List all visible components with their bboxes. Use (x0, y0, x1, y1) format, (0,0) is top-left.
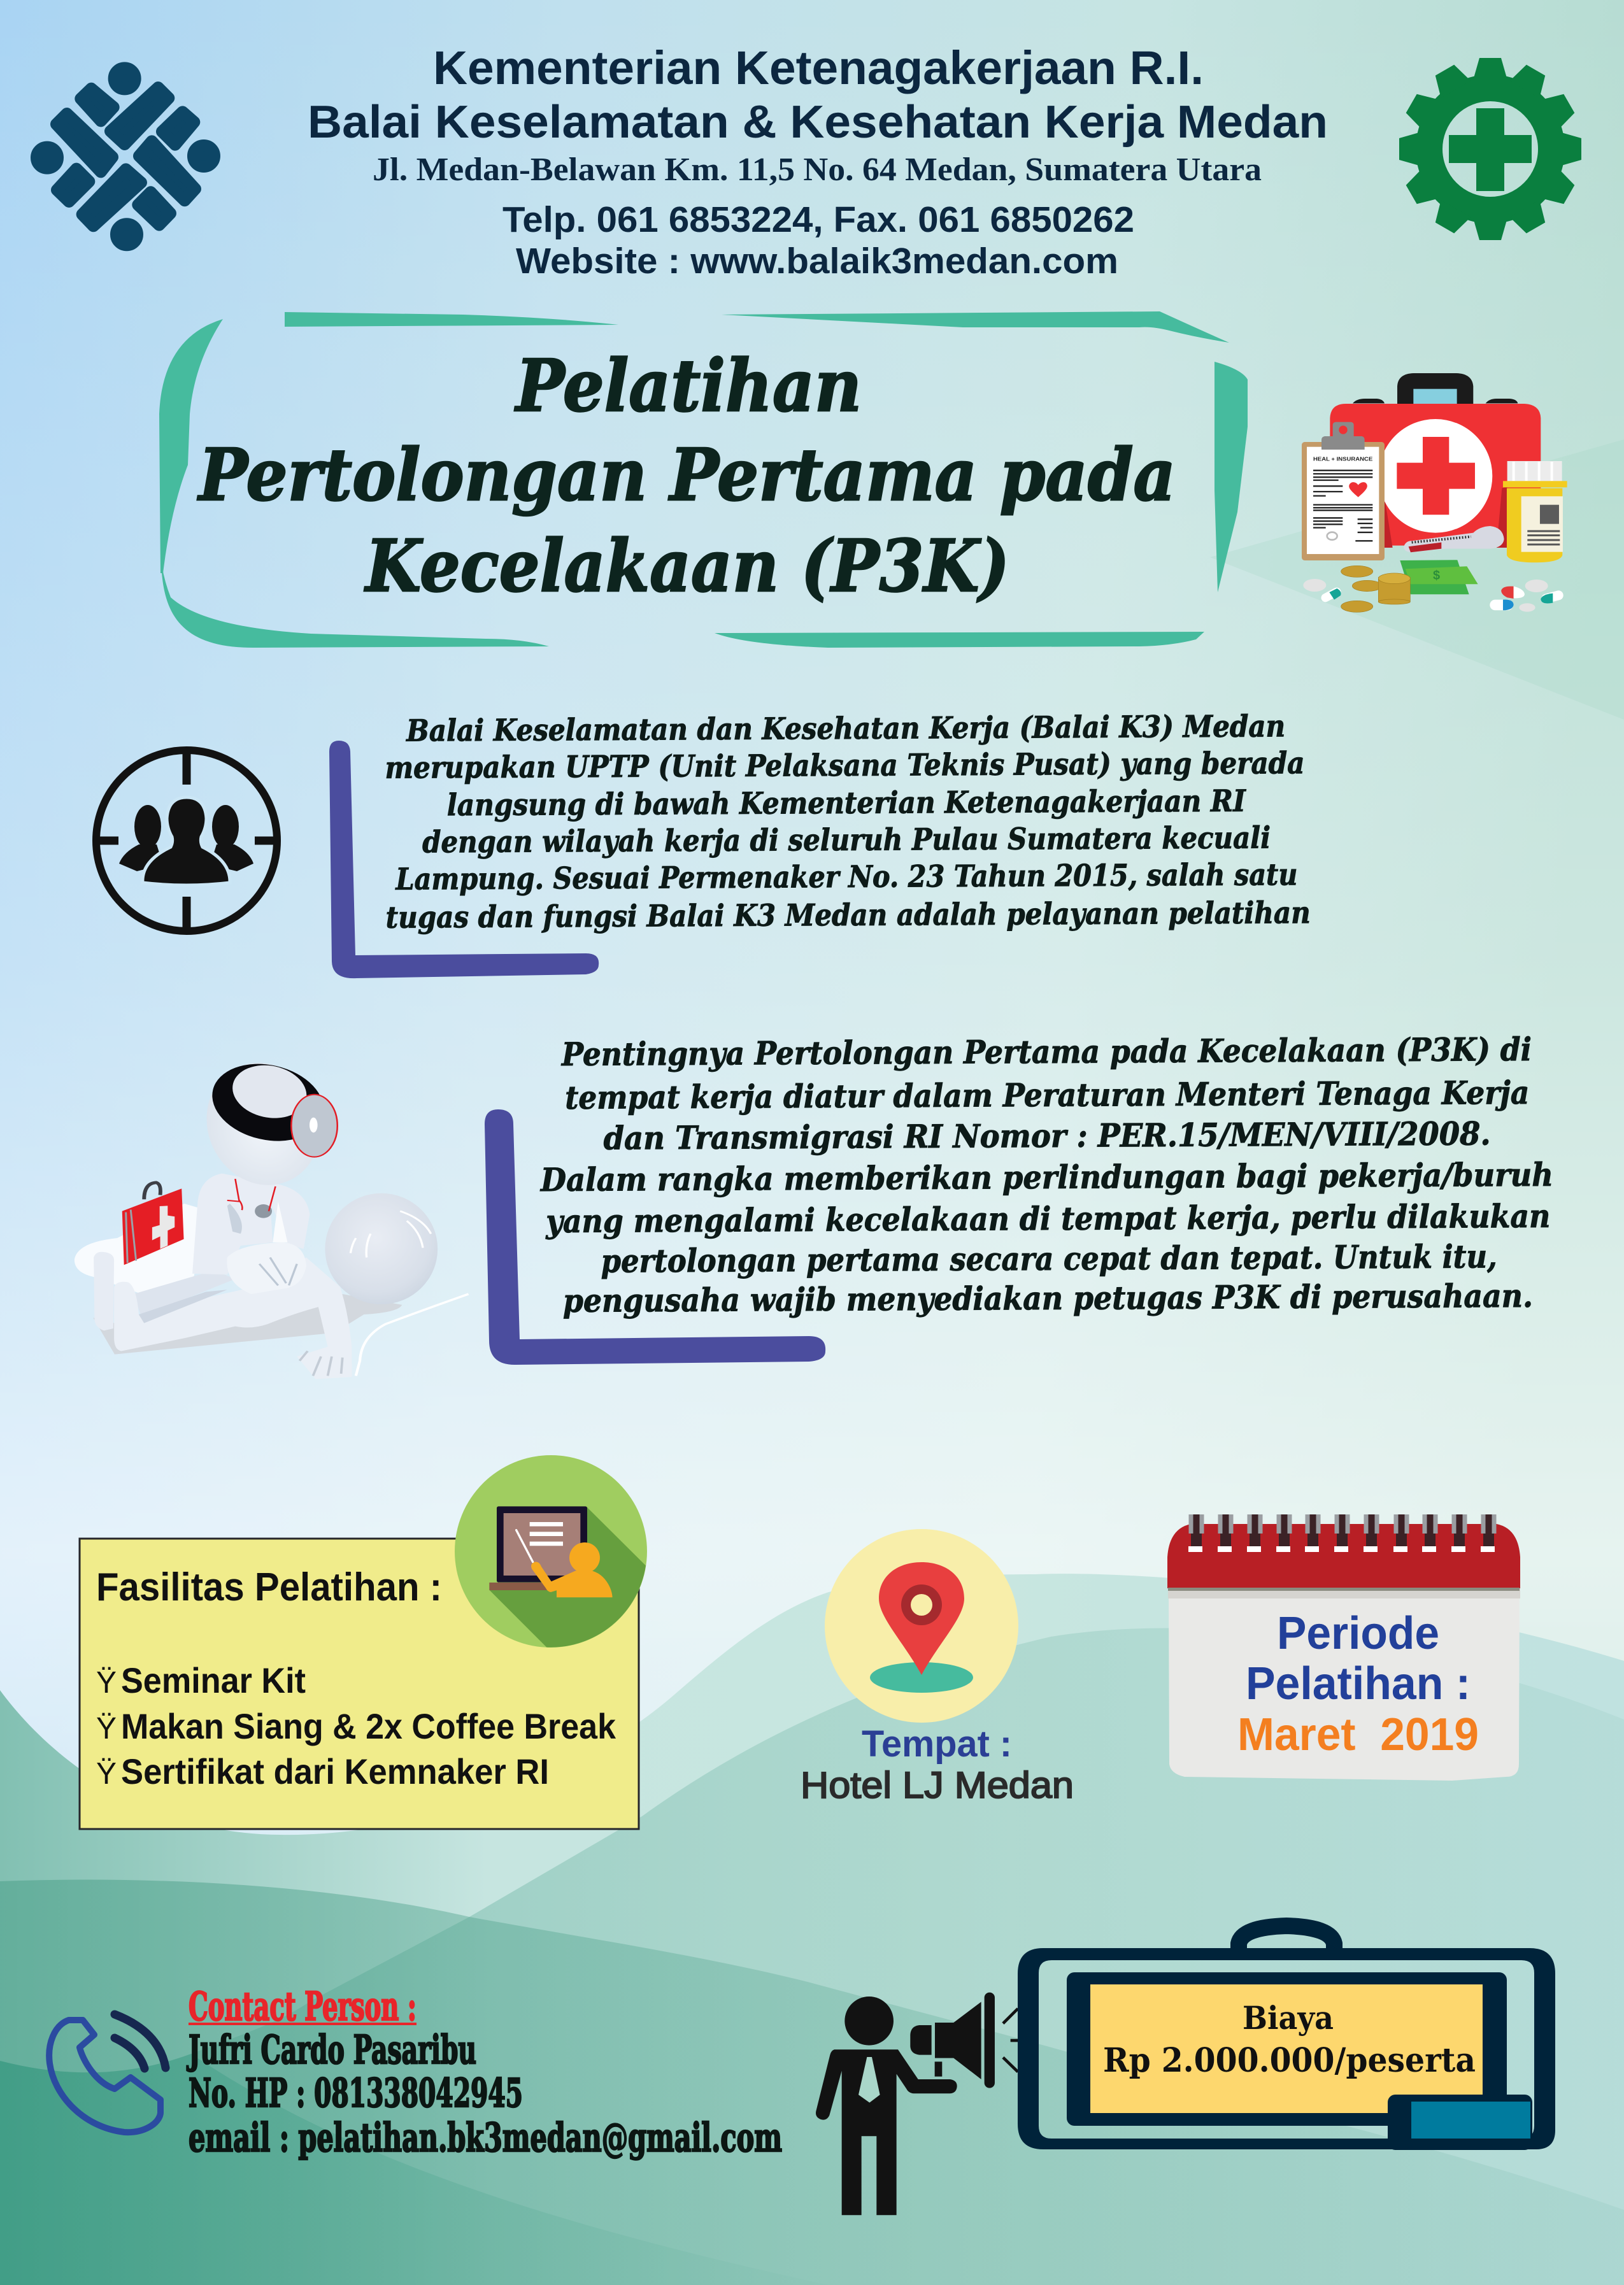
location label: Tempat : (862, 1723, 1012, 1765)
illustration: CPR figure with doctor (75, 1050, 469, 1379)
paragraph 1: merupakan UPTP (Unit Pelaksana Teknis Pusat) yang berada (385, 746, 1305, 786)
facilities list: Ÿ (96, 1666, 117, 1700)
small red first aid case (122, 1183, 184, 1265)
paragraph 1: Lampung. Sesuai Permenaker No. 23 Tahun 2015, salah satu (395, 857, 1298, 897)
ground shadow (93, 1294, 402, 1355)
paragraph 2: yang mengalami kecelakaan di tempat kerja, perlu dilakukan (545, 1197, 1550, 1240)
period text: Pelatihan : (1246, 1658, 1471, 1709)
money: $ (1433, 569, 1440, 583)
clipboard: HEAL + INSURANCE (1313, 456, 1373, 462)
patient head (325, 1193, 438, 1304)
cost label: Biaya (1243, 1999, 1334, 2037)
paragraph 2 (539, 1030, 1554, 1320)
panel: biaya briefcase (1018, 1926, 1555, 2150)
paragraph 2: Pentingnya Pertolongan Pertama pada Kecelakaan (P3K) di (560, 1030, 1532, 1073)
bracket 2 (485, 1109, 825, 1365)
thermometer (1404, 526, 1504, 552)
pills (1303, 579, 1564, 612)
paragraph 2: pertolongan pertama secara cepat dan tepat. Untuk itu, (601, 1237, 1497, 1280)
paragraph 1: Balai Keselamatan dan Kesehatan Kerja (Balai K3) Medan (405, 709, 1285, 749)
rescuer torso and arms (192, 1174, 310, 1294)
location label (801, 1723, 1074, 1806)
facilities list: Sertifikat dari Kemnaker RI (121, 1751, 549, 1791)
bracket 1 (329, 741, 599, 978)
paragraph 1: dengan wilayah kerja di seluruh Pulau Sumatera kecuali (422, 821, 1271, 860)
title line 2: Pertolongan Pertama pada (197, 434, 1176, 517)
organisation name line 1: Kementerian Ketenagakerjaan R.I. (433, 41, 1204, 94)
contact heading: Contact Person : (189, 1983, 417, 2030)
address: Jl. Medan-Belawan Km. 11,5 No. 64 Medan, Sumatera Utara (373, 152, 1262, 188)
paragraph 2: tempat kerja diatur dalam Peraturan Menteri Tenaga Kerja (565, 1074, 1529, 1116)
icon: location pin (825, 1529, 1018, 1723)
period text (1237, 1608, 1479, 1760)
location label: Hotel LJ Medan (801, 1765, 1074, 1806)
panel: fasilitas pelatihan (80, 1539, 639, 1829)
icon: phone (49, 2014, 166, 2132)
patient body (94, 1252, 352, 1379)
facilities list: Ÿ (96, 1712, 117, 1746)
calendar (1167, 1514, 1520, 1781)
paragraph 2: dan Transmigrasi RI Nomor : PER.15/MEN/VIII/2008. (603, 1114, 1491, 1157)
contact details: email : pelatihan.bk3medan@gmail.com (189, 2114, 782, 2161)
coins (1341, 566, 1410, 612)
title frame strokes (159, 311, 1248, 648)
facilities list (96, 1660, 616, 1791)
paragraph 2: Dalam rangka memberikan perlindungan bagi pekerja/buruh (539, 1156, 1553, 1199)
icon: teacher at blackboard (455, 1455, 647, 1648)
contact heading (189, 1983, 417, 2030)
paragraph 1: tugas dan fungsi Balai K3 Medan adalah pelayanan pelatihan (386, 895, 1311, 936)
title line 3: Kecelakaan (P3K) (364, 525, 1009, 608)
contact details: No. HP : 081338042945 (189, 2070, 523, 2116)
phone and fax: Telp. 061 6853224, Fax. 061 6850262 (502, 199, 1134, 240)
contact details (186, 2026, 782, 2161)
icon: target group of people (96, 750, 277, 931)
medicine bottle (1503, 461, 1567, 562)
main title (197, 345, 1176, 608)
rescuer head (196, 1050, 339, 1191)
paragraph 1 (385, 709, 1311, 936)
fasilitas heading: Fasilitas Pelatihan : (96, 1565, 442, 1609)
calendar rings (1188, 1514, 1495, 1552)
logo: Kemnaker (36, 68, 215, 245)
clipboard (1302, 422, 1385, 560)
contact person (186, 1983, 782, 2161)
facilities list: Seminar Kit (121, 1660, 306, 1700)
cost amount: Rp 2.000.000/peserta (1103, 2041, 1476, 2080)
header text (308, 41, 1328, 281)
contact details: Jufri Cardo Pasaribu (186, 2026, 476, 2073)
white highlight line (356, 1294, 469, 1376)
paragraph 2: pengusaha wajib menyediakan petugas P3K di perusahaan. (563, 1277, 1533, 1320)
title line 1: Pelatihan (514, 345, 862, 428)
paragraph 1: langsung di bawah Kementerian Ketenagakerjaan RI (447, 784, 1247, 823)
website: Website : www.balaik3medan.com (516, 241, 1118, 281)
period text: Periode (1277, 1608, 1439, 1659)
icon: man with megaphone (816, 1993, 1031, 2215)
icon: first aid kit with documents and money (1302, 373, 1567, 612)
period text: Maret 2019 (1237, 1709, 1479, 1760)
facilities list: Makan Siang & 2x Coffee Break (121, 1706, 616, 1746)
money (1400, 560, 1478, 594)
organisation name line 2: Balai Keselamatan & Kesehatan Kerja Medan (308, 97, 1328, 148)
facilities list: Ÿ (96, 1757, 117, 1791)
logo: K3 gear (1399, 58, 1581, 240)
